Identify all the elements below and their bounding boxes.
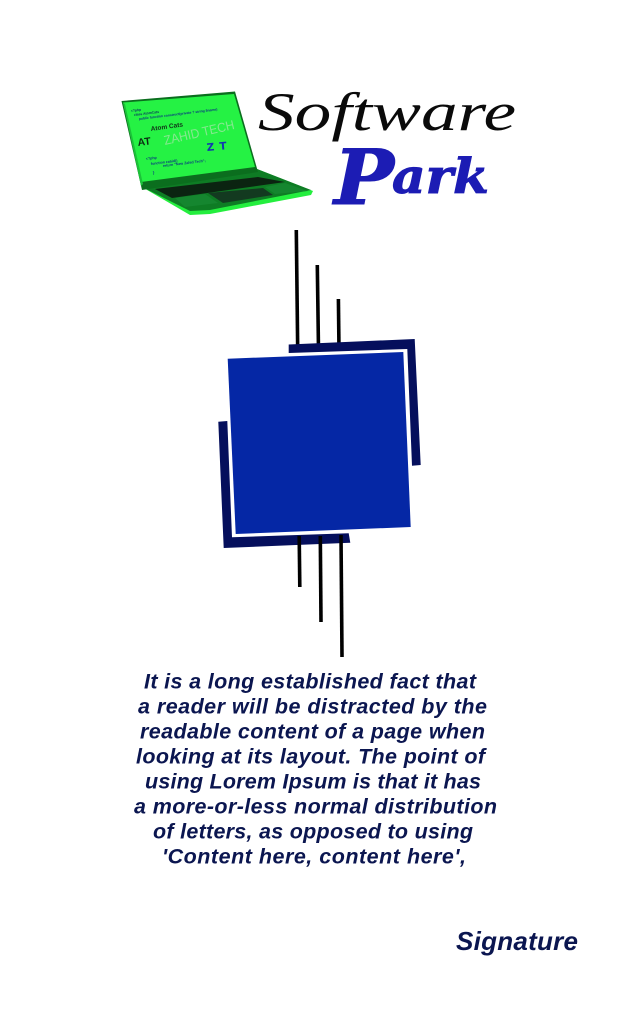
signature: Signature [456,926,578,956]
top three vertical lines [296,230,339,350]
logo: Software wordmark: Software [258,82,516,142]
body paragraph: 'Content here, content here', [162,844,466,868]
logo: laptop icon: class AtomCats [134,110,159,117]
bottom three vertical lines [299,535,342,657]
logo: Park wordmark [332,133,489,222]
body paragraph: a more-or-less normal distribution [134,794,497,818]
body paragraph: looking at its layout. The point of [136,744,487,768]
body paragraph: readable content of a page when [140,720,485,744]
body paragraph: It is a long established fact that [144,670,477,694]
logo: laptop icon: function zahid() [151,159,178,166]
logo: laptop icon: public function construct(private ? string $name) [139,107,218,121]
bottom-left bracket [218,421,350,548]
top-right bracket [289,339,421,466]
logo: Park wordmark: P [332,133,396,222]
body paragraph [134,670,497,868]
logo: laptop icon: } [153,170,155,175]
body paragraph: using Lorem Ipsum is that it has [145,770,481,794]
logo: laptop icon: Z T [206,140,228,154]
logo: laptop icon: Atom Cats [150,121,184,133]
logo: laptop icon: ZAHID TECH [162,117,236,148]
logo: laptop icon: AT [137,135,152,149]
logo: laptop icon: <?php [146,156,158,161]
logo: laptop icon [122,92,313,215]
logo: laptop icon: return "New Zahid Tech"; [163,159,206,168]
logo: Park wordmark: ark [392,149,489,205]
body paragraph: a reader will be distracted by the [138,694,487,718]
central blue square [228,352,411,534]
body paragraph: of letters, as opposed to using [153,820,473,844]
logo: laptop icon: <?php [131,108,141,113]
